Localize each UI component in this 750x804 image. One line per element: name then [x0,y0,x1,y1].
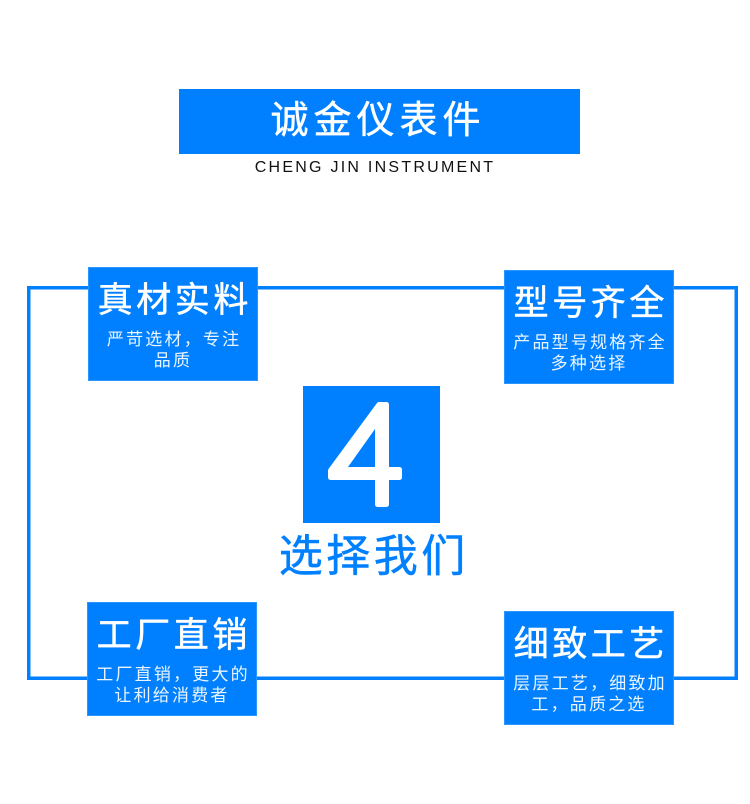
text: complete models description: 多种选择 [551,354,627,373]
title banner [179,89,580,154]
heading: genuine materials: 真材实料 [98,281,252,320]
text: factory direct description [96,665,250,705]
text: complete models description [513,333,667,373]
text: complete models description: 产品型号规格齐全 [513,333,667,352]
English subtitle: CHENG JIN INSTRUMENT [255,159,495,176]
text: genuine materials description: 严苛选材，专注 [107,330,241,349]
text: fine craftsmanship description [513,674,667,714]
panel: complete models [504,270,674,384]
title banner: 诚金仪表件 [270,100,486,142]
text: fine craftsmanship description: 工，品质之选 [531,695,647,714]
center number badge [303,386,440,523]
text: genuine materials description [107,330,241,370]
heading: fine craftsmanship: 细致工艺 [514,625,668,664]
text: factory direct description: 工厂直销，更大的 [96,665,250,684]
heading: factory direct: 工厂直销 [97,616,251,655]
text: factory direct description: 让利给消费者 [114,686,230,705]
panel: factory direct [87,602,257,716]
heading: choose us: 选择我们 [279,532,469,581]
number 4 [330,404,400,504]
heading: complete models: 型号齐全 [514,284,668,323]
panel: fine craftsmanship [504,611,674,725]
text: fine craftsmanship description: 层层工艺，细致加 [513,674,667,693]
panel: genuine materials [88,267,258,381]
text: genuine materials description: 品质 [154,351,192,370]
